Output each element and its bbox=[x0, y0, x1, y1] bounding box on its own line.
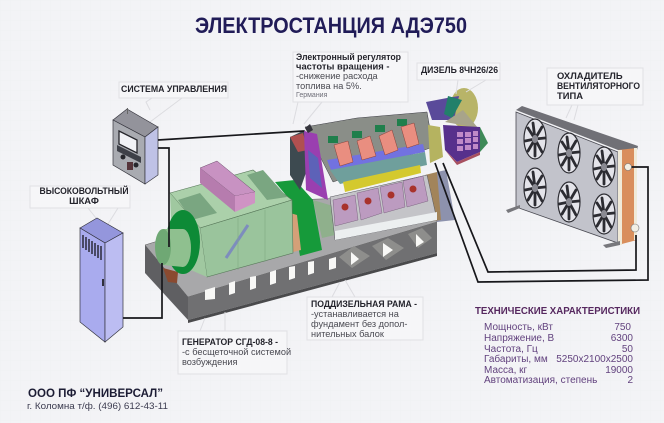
icon: high-voltage cabinet bbox=[80, 218, 123, 342]
callout: electronic speed regulator: топлива на 5%. bbox=[296, 81, 362, 91]
callout: high-voltage cabinet: ВЫСОКОВОЛЬТНЫЙ bbox=[40, 185, 129, 196]
callout: sub-diesel frame: нительных балок bbox=[311, 329, 385, 339]
timing gear housing bbox=[290, 124, 328, 200]
technical specifications: 2 bbox=[627, 375, 633, 386]
callout: generator: ГЕНЕРАТОР СГД-08-8 - bbox=[182, 336, 278, 347]
callout: electronic speed regulator: Германия bbox=[296, 92, 328, 99]
callout: sub-diesel frame: -устанавливается на bbox=[311, 309, 400, 319]
technical specifications: Мощность, кВт bbox=[484, 322, 553, 333]
callout: control system: СИСТЕМА УПРАВЛЕНИЯ bbox=[121, 83, 227, 94]
callout: high-voltage cabinet bbox=[30, 185, 130, 224]
callout: sub-diesel frame bbox=[307, 280, 423, 340]
callout: electronic speed regulator: Электронный регулятор bbox=[296, 51, 401, 62]
callout: electronic speed regulator: -снижение расхода bbox=[296, 71, 379, 81]
cylinder block panels bbox=[333, 176, 428, 226]
company footer bbox=[27, 386, 168, 412]
technical specifications: 19000 bbox=[605, 365, 633, 376]
cylinder heads bbox=[334, 123, 419, 166]
technical specifications: Частота, Гц bbox=[484, 344, 538, 355]
technical specifications: 5250x2100x2500 bbox=[556, 354, 633, 365]
callout: generator: -с бесщеточной системой bbox=[182, 347, 291, 357]
technical specifications: 6300 bbox=[611, 333, 633, 344]
callout: high-voltage cabinet: ШКАФ bbox=[69, 195, 99, 206]
title: ЭЛЕКТРОСТАНЦИЯ АДЭ750 bbox=[195, 13, 467, 38]
callout: electronic speed regulator: частоты вращения - bbox=[296, 60, 389, 72]
turbocharger and filter bbox=[426, 88, 488, 165]
technical specifications bbox=[475, 306, 640, 386]
icon: control cabinet bbox=[113, 108, 158, 184]
wiring between units bbox=[123, 131, 304, 318]
callout: fan cooler: ТИПА bbox=[557, 90, 583, 101]
callout: diesel engine: ДИЗЕЛЬ 8ЧН26/26 bbox=[421, 64, 498, 75]
technical specifications: 50 bbox=[622, 344, 633, 355]
company footer: г. Коломна т/ф. (496) 612-43-11 bbox=[27, 401, 168, 412]
fans bbox=[524, 119, 615, 234]
callout: diesel engine bbox=[417, 63, 500, 94]
callout: generator: возбуждения bbox=[182, 357, 237, 367]
technical specifications: ТЕХНИЧЕСКИЕ ХАРАКТЕРИСТИКИ bbox=[475, 306, 640, 317]
company footer: ООО ПФ “УНИВЕРСАЛ” bbox=[28, 386, 163, 400]
coolant pipes bbox=[435, 163, 648, 282]
callout: sub-diesel frame: ПОДДИЗЕЛЬНАЯ РАМА - bbox=[311, 298, 417, 309]
diesel engine bbox=[290, 88, 488, 240]
technical specifications: Масса, кг bbox=[484, 365, 527, 376]
fan cooler radiator bbox=[506, 106, 638, 248]
technical specifications: 750 bbox=[614, 322, 631, 333]
technical specifications: Напряжение, В bbox=[484, 333, 555, 344]
callout: control system bbox=[119, 82, 228, 122]
technical specifications: Габариты, мм bbox=[484, 353, 548, 365]
frame windows bbox=[205, 234, 424, 300]
generator bbox=[155, 161, 335, 277]
callout: generator bbox=[178, 312, 291, 374]
technical specifications: Автоматизация, степень bbox=[484, 375, 597, 386]
callout: fan cooler: ОХЛАДИТЕЛЬ bbox=[557, 70, 623, 81]
callout: fan cooler: ВЕНТИЛЯТОРНОГО bbox=[557, 80, 640, 91]
callout: fan cooler bbox=[547, 68, 643, 120]
base frame bbox=[145, 195, 437, 323]
callout: sub-diesel frame: фундамент без допол- bbox=[311, 319, 407, 329]
callout: electronic speed regulator bbox=[293, 51, 408, 124]
terminal box bbox=[200, 161, 255, 212]
